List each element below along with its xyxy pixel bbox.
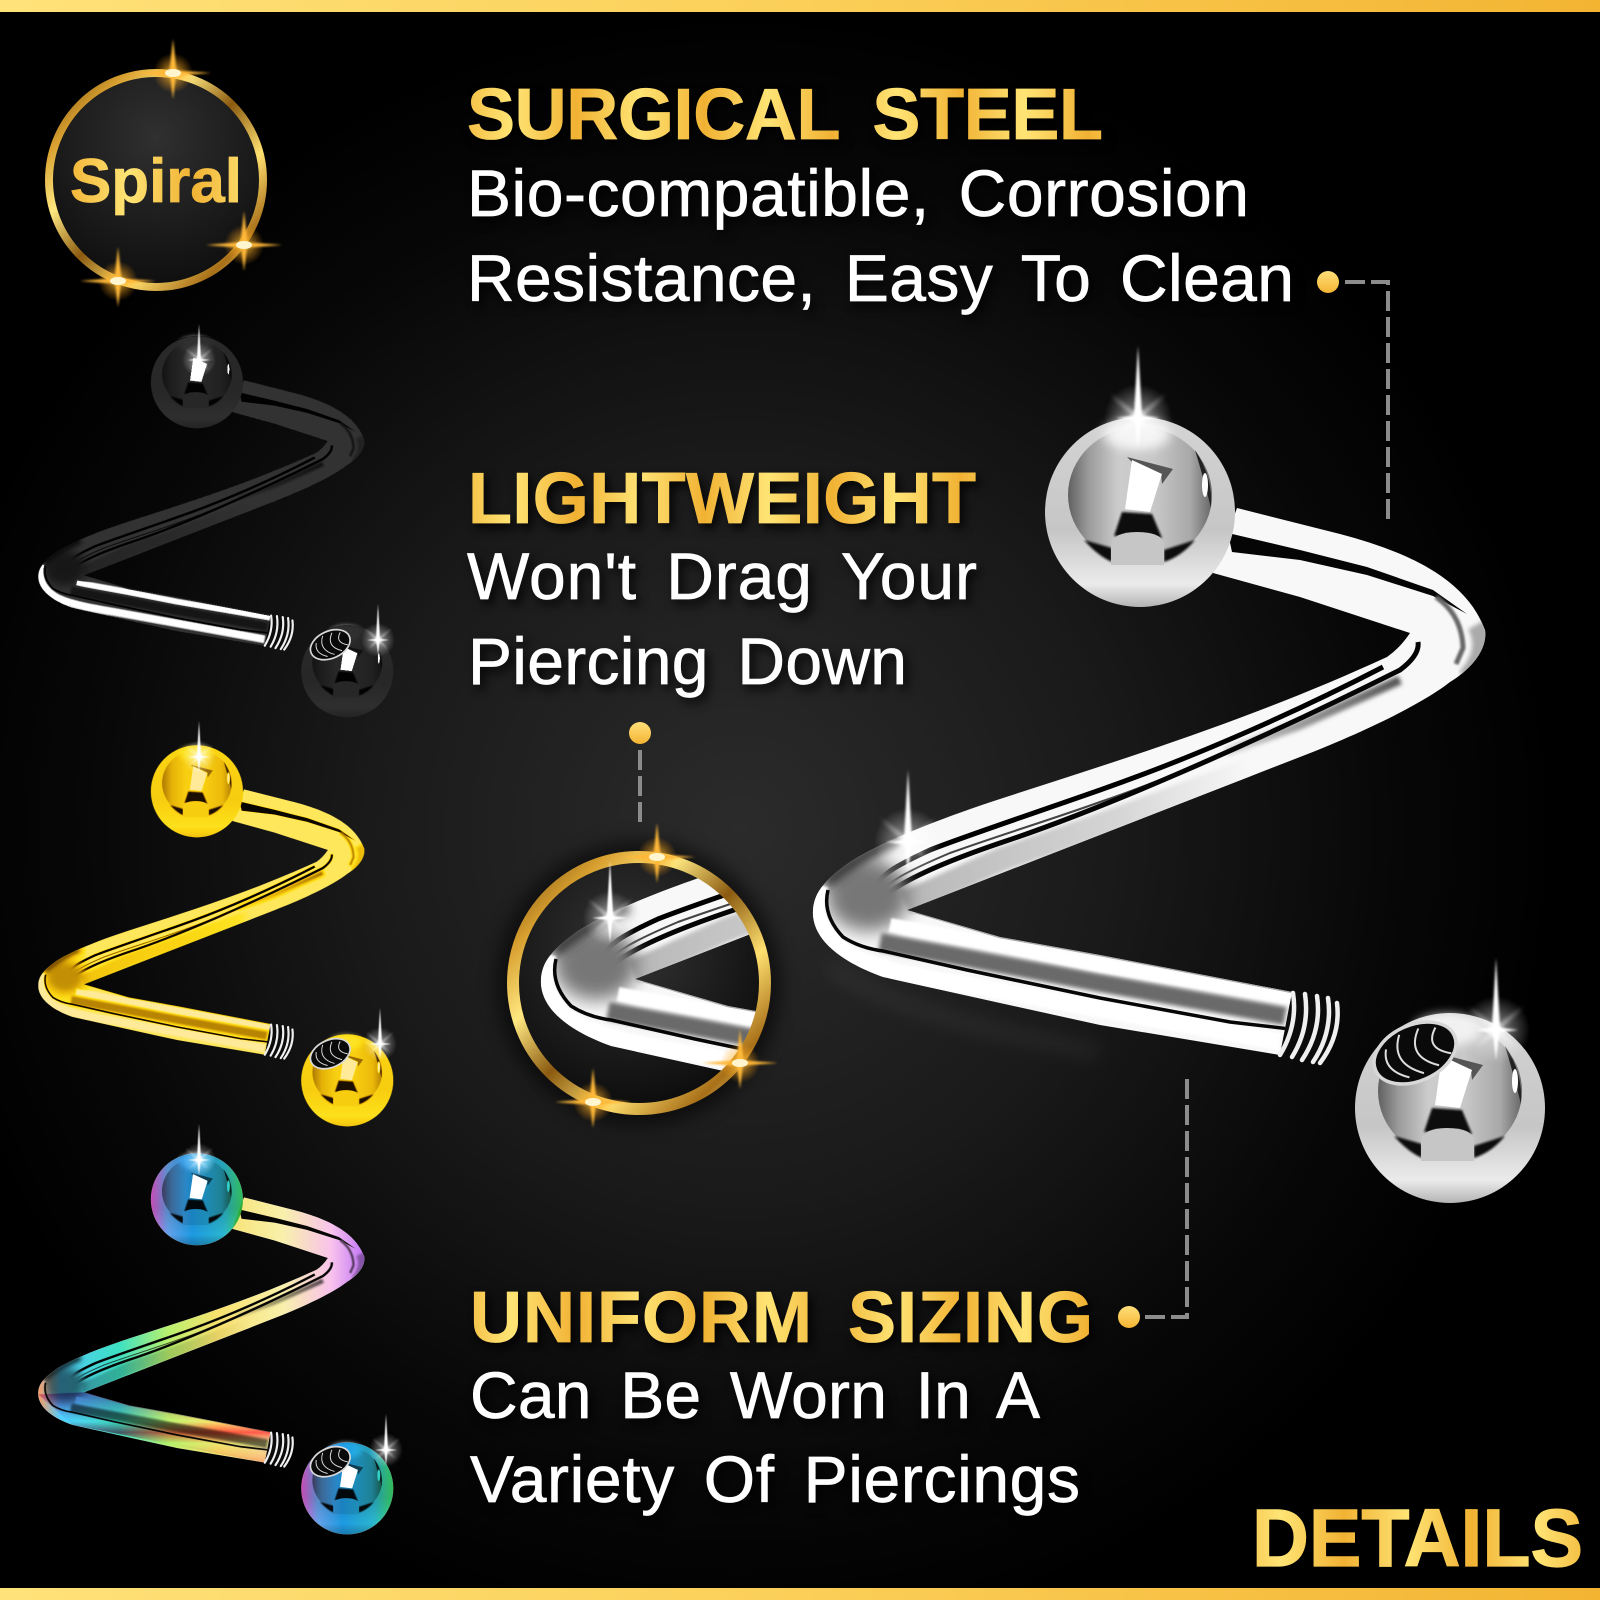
text block: lightweight: Piercing Down	[468, 624, 907, 698]
large silver spiral piercing	[813, 417, 1545, 1203]
gold spiral piercing	[38, 745, 393, 1126]
text block: surgical steel: Resistance, Easy To Clean	[467, 241, 1294, 315]
sparkles on small piercings	[182, 324, 403, 1467]
callout leader: surgical steel	[1317, 271, 1388, 521]
badge: Spiral: Spiral	[70, 147, 242, 216]
text block: surgical steel	[467, 75, 1294, 315]
text block: uniform sizing: Can Be Worn In A	[470, 1358, 1040, 1432]
reflection under large piercing	[830, 965, 1100, 1052]
sparkles on large piercing	[874, 346, 1530, 1064]
text block: uniform sizing	[470, 1278, 1093, 1516]
text block: uniform sizing: UNIFORM SIZING	[470, 1278, 1093, 1358]
top gold bar	[0, 0, 1600, 12]
rainbow spiral piercing	[38, 1153, 393, 1534]
title: details: DETAILS	[1252, 1493, 1583, 1584]
black spiral piercing	[38, 336, 393, 717]
text block: lightweight	[467, 459, 977, 698]
badge: Spiral	[49, 39, 282, 307]
text block: surgical steel: SURGICAL STEEL	[467, 75, 1103, 155]
text block: lightweight: Won't Drag Your	[467, 539, 977, 613]
callout leader: uniform sizing	[1118, 1079, 1187, 1328]
text block: uniform sizing: Variety Of Piercings	[470, 1442, 1080, 1516]
callout leader: lightweight	[629, 722, 651, 823]
text block: surgical steel: Bio-compatible, Corrosion	[467, 156, 1249, 230]
text block: lightweight: LIGHTWEIGHT	[468, 459, 976, 539]
bottom gold bar	[0, 1588, 1600, 1600]
magnified inset circle	[497, 824, 783, 1128]
